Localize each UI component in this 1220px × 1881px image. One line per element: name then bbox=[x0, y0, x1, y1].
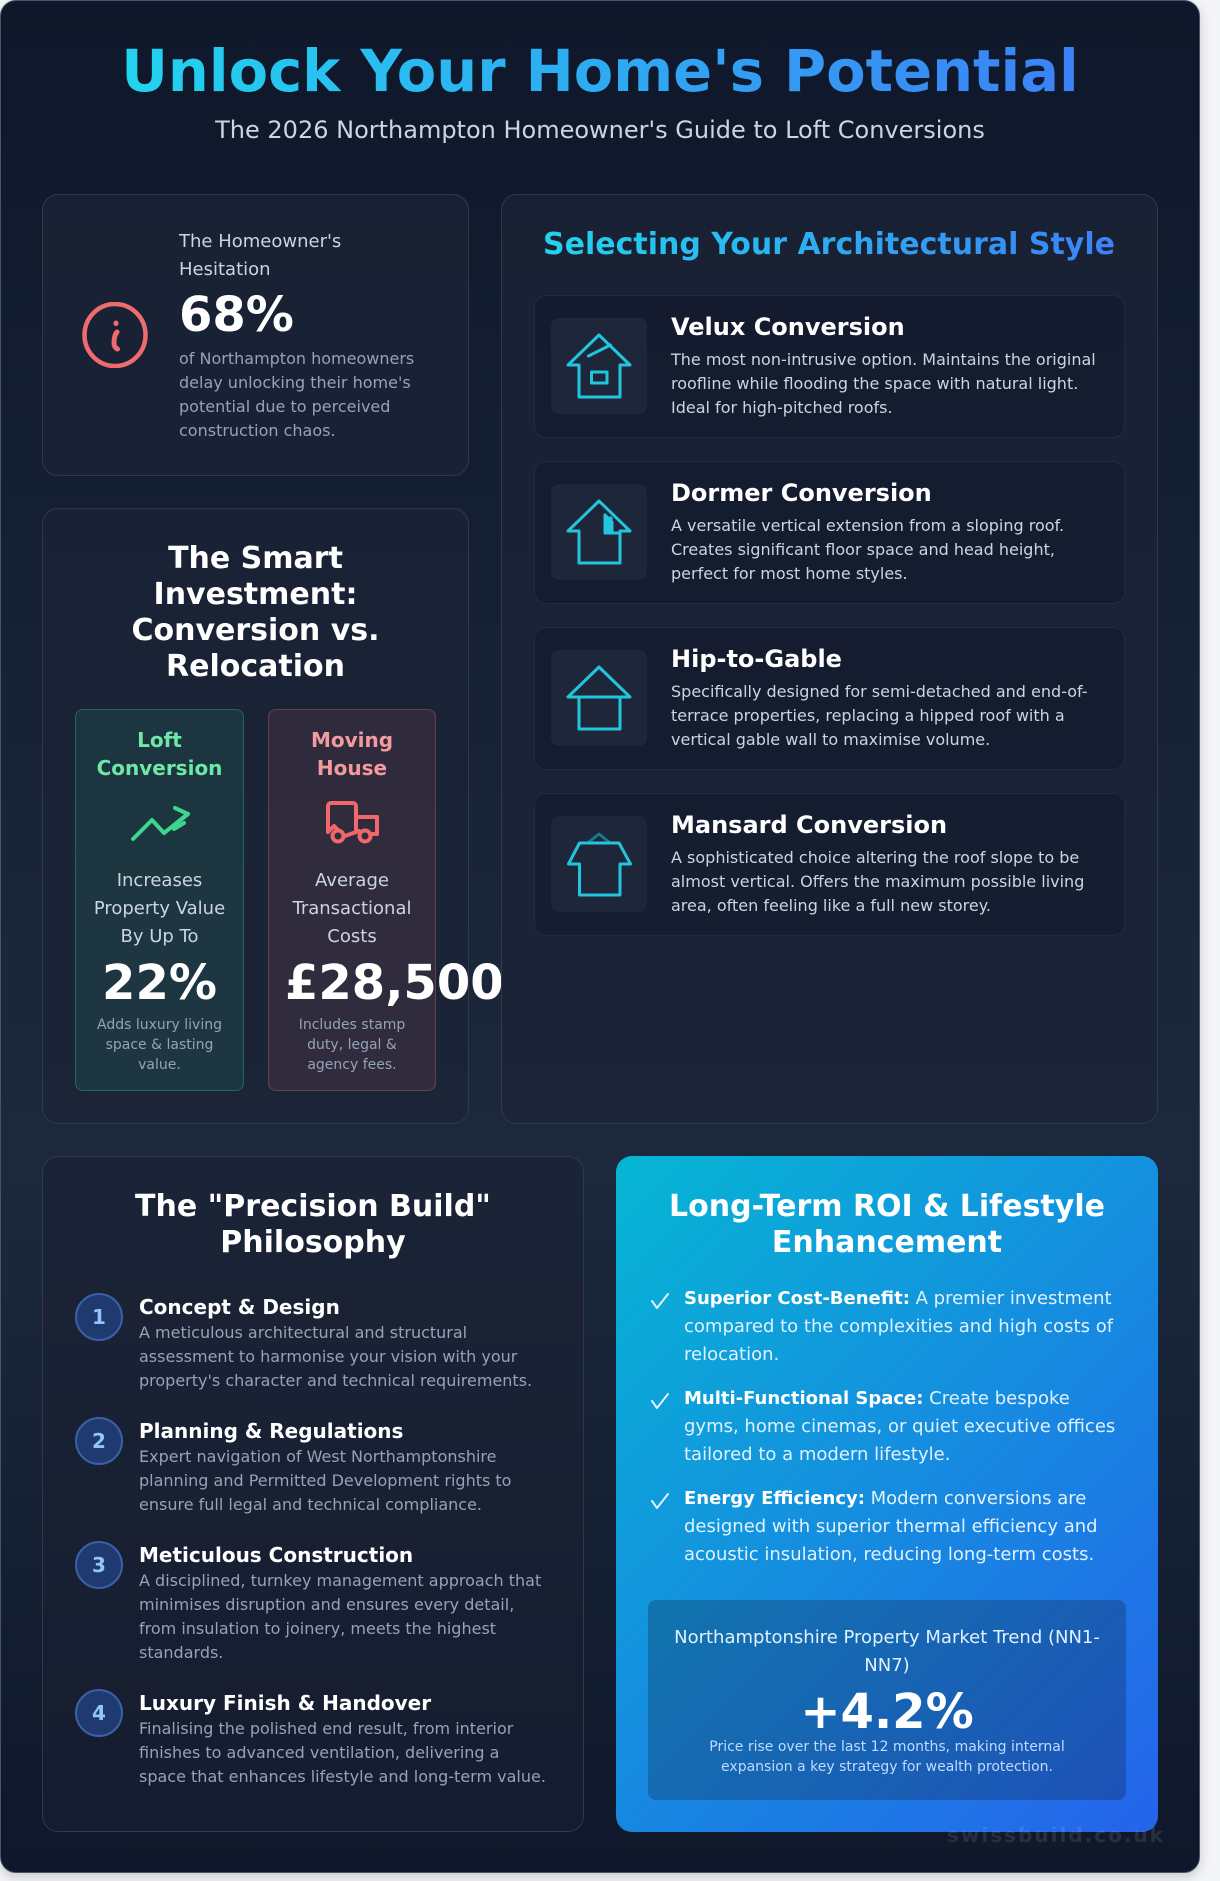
smart investment heading: Relocation bbox=[166, 649, 345, 684]
step 2 number bbox=[75, 1417, 123, 1465]
benefit 1: compared to the complexities and high costs of bbox=[684, 1316, 1113, 1336]
benefit 3: Energy Efficiency: Modern conversions are bbox=[684, 1488, 1086, 1508]
step 1 description: A meticulous architectural and structural bbox=[139, 1323, 467, 1342]
icon: check 3 bbox=[651, 1493, 669, 1509]
moving note: Includes stamp bbox=[299, 1017, 405, 1033]
hesitation label bbox=[178, 230, 341, 280]
hesitation description bbox=[179, 349, 414, 440]
dormer description bbox=[671, 516, 1064, 583]
icon: gable house bbox=[551, 650, 647, 746]
dormer description: A versatile vertical extension from a sloping roof. bbox=[671, 516, 1064, 535]
architectural styles heading: Selecting Your Architectural Style bbox=[543, 227, 1115, 262]
benefit 2: gyms, home cinemas, or quiet executive offices bbox=[684, 1416, 1115, 1436]
step 3 description: from insulation to joinery, meets the highest bbox=[139, 1619, 496, 1638]
ROI heading bbox=[669, 1189, 1105, 1260]
benefit 1: relocation. bbox=[684, 1344, 779, 1364]
icon: trending up bbox=[130, 806, 190, 842]
hesitation label: The Homeowner's bbox=[179, 230, 341, 252]
smart investment heading: Investment: bbox=[154, 577, 357, 612]
velux description bbox=[670, 350, 1096, 417]
step 3 description: minimises disruption and ensures every detail, bbox=[139, 1595, 514, 1614]
market trend note: expansion a key strategy for wealth protection. bbox=[721, 1759, 1053, 1775]
hesitation description: of Northampton homeowners bbox=[179, 349, 414, 368]
icon: mansard house bbox=[551, 816, 647, 912]
moving note: duty, legal & bbox=[307, 1037, 397, 1053]
step 4 title: Luxury Finish & Handover bbox=[139, 1691, 431, 1715]
step 3 description bbox=[139, 1571, 541, 1662]
icon: truck bbox=[326, 801, 379, 844]
panel: architectural styles bbox=[501, 194, 1158, 1124]
dormer title: Dormer Conversion bbox=[671, 479, 932, 507]
mansard description: almost vertical. Offers the maximum possible living bbox=[671, 872, 1084, 891]
step 4 description: space that enhances lifestyle and long-term value. bbox=[139, 1767, 546, 1786]
step 2 description bbox=[139, 1447, 511, 1514]
style card: mansard bbox=[534, 793, 1125, 936]
moving card heading bbox=[311, 728, 393, 780]
benefit 2: tailored to a modern lifestyle. bbox=[684, 1444, 950, 1464]
subtitle: The 2026 Northampton Homeowner's Guide to Loft Conversions bbox=[215, 116, 985, 144]
step 4 description bbox=[139, 1719, 546, 1786]
step 1 number bbox=[75, 1293, 123, 1341]
market trend note: Price rise over the last 12 months, making internal bbox=[709, 1739, 1065, 1755]
step 3 description: standards. bbox=[139, 1643, 223, 1662]
loft card heading bbox=[97, 728, 222, 780]
style card: dormer bbox=[534, 461, 1125, 604]
mansard title: Mansard Conversion bbox=[671, 811, 947, 839]
style card: hip-to-gable bbox=[534, 627, 1125, 770]
hesitation label: Hesitation bbox=[179, 258, 271, 280]
icon: check 2 bbox=[651, 1393, 669, 1409]
market trend statistic: +4.2% bbox=[800, 1684, 974, 1740]
callout: market trend bbox=[648, 1600, 1126, 1800]
moving note bbox=[299, 1017, 405, 1073]
loft note: value. bbox=[138, 1057, 181, 1073]
moving card heading: Moving bbox=[311, 728, 393, 752]
step 1 description: assessment to harmonise your vision with your bbox=[139, 1347, 517, 1366]
velux description: roofline while flooding the space with natural light. bbox=[671, 374, 1078, 393]
ROI heading: Enhancement bbox=[772, 1225, 1002, 1260]
style card: velux bbox=[534, 295, 1125, 438]
velux description: Ideal for high-pitched roofs. bbox=[671, 398, 893, 417]
hip-to-gable title: Hip-to-Gable bbox=[671, 645, 842, 673]
mansard description: area, often feeling like a full new storey. bbox=[671, 896, 991, 915]
loft statistic: 22% bbox=[102, 955, 217, 1011]
step 3 number bbox=[75, 1541, 123, 1589]
benefit 3: acoustic insulation, reducing long-term costs. bbox=[684, 1544, 1094, 1564]
step 2 title: Planning & Regulations bbox=[139, 1419, 403, 1443]
loft card heading: Conversion bbox=[97, 756, 222, 780]
dormer description: Creates significant floor space and head height, bbox=[671, 540, 1055, 559]
title: Unlock Your Home's Potential bbox=[121, 38, 1079, 105]
velux description: The most non-intrusive option. Maintains the original bbox=[671, 350, 1096, 369]
step 3 description: A disciplined, turnkey management approach that bbox=[139, 1571, 541, 1590]
moving card label: Average bbox=[315, 870, 389, 891]
benefit 3 bbox=[684, 1488, 1098, 1564]
icon: info circle bbox=[82, 302, 148, 368]
mansard description: A sophisticated choice altering the roof slope to be bbox=[671, 848, 1079, 867]
moving note: agency fees. bbox=[307, 1057, 397, 1073]
benefit 3: designed with superior thermal efficiency and bbox=[684, 1516, 1098, 1536]
moving card label: Costs bbox=[327, 926, 377, 947]
icon: dormer house bbox=[551, 484, 647, 580]
moving card label: Transactional bbox=[292, 898, 412, 919]
hip-to-gable description: Specifically designed for semi-detached and end-of- bbox=[671, 682, 1088, 701]
step 3 number: 3 bbox=[92, 1553, 106, 1577]
comparison card: moving house bbox=[268, 709, 436, 1091]
step 1 description: property's character and technical requirements. bbox=[139, 1371, 532, 1390]
step 2 description: Expert navigation of West Northamptonshire bbox=[139, 1447, 496, 1466]
loft note: space & lasting bbox=[106, 1037, 213, 1053]
market trend note bbox=[709, 1739, 1065, 1775]
step 2 number: 2 bbox=[92, 1429, 106, 1453]
panel: homeowner's hesitation bbox=[42, 194, 469, 476]
velux title: Velux Conversion bbox=[671, 313, 905, 341]
loft note bbox=[97, 1017, 222, 1073]
precision build heading: The "Precision Build" bbox=[135, 1189, 491, 1224]
hip-to-gable description: terrace properties, replacing a hipped roof with a bbox=[671, 706, 1065, 725]
moving card heading: House bbox=[317, 756, 387, 780]
hesitation description: potential due to perceived bbox=[179, 397, 390, 416]
loft card label bbox=[94, 870, 225, 947]
mansard description bbox=[671, 848, 1084, 915]
benefit 1: Superior Cost-Benefit: A premier investment bbox=[684, 1288, 1112, 1308]
moving card label bbox=[292, 870, 412, 947]
ROI heading: Long-Term ROI & Lifestyle bbox=[669, 1189, 1105, 1224]
smart investment heading bbox=[131, 541, 380, 684]
market trend label bbox=[674, 1627, 1100, 1676]
loft card heading: Loft bbox=[137, 728, 182, 752]
precision build heading: Philosophy bbox=[220, 1225, 406, 1260]
hesitation description: delay unlocking their home's bbox=[179, 373, 411, 392]
step 4 description: Finalising the polished end result, from interior bbox=[139, 1719, 513, 1738]
loft card label: Increases bbox=[117, 870, 202, 891]
icon: velux house bbox=[551, 318, 647, 414]
hesitation statistic: 68% bbox=[179, 287, 294, 343]
comparison card: loft conversion bbox=[75, 709, 244, 1091]
step 2 description: planning and Permitted Development rights to bbox=[139, 1471, 511, 1490]
loft card label: By Up To bbox=[120, 926, 198, 947]
step 4 description: finishes to advanced ventilation, delivering a bbox=[139, 1743, 499, 1762]
step 2 description: ensure full legal and technical compliance. bbox=[139, 1495, 482, 1514]
step 4 number: 4 bbox=[92, 1701, 106, 1725]
benefit 1 bbox=[684, 1288, 1114, 1364]
market trend label: NN7) bbox=[864, 1655, 910, 1676]
benefit 2 bbox=[684, 1388, 1115, 1464]
loft card label: Property Value bbox=[94, 898, 225, 919]
step 1 title: Concept & Design bbox=[139, 1295, 340, 1319]
benefit 2: Multi-Functional Space: Create bespoke bbox=[684, 1388, 1070, 1408]
panel: precision build bbox=[42, 1156, 584, 1832]
step 3 title: Meticulous Construction bbox=[139, 1543, 413, 1567]
step 4 number bbox=[75, 1689, 123, 1737]
hip-to-gable description: vertical gable wall to maximise volume. bbox=[671, 730, 990, 749]
watermark: swissbuild.co.uk bbox=[947, 1823, 1165, 1847]
loft note: Adds luxury living bbox=[97, 1017, 222, 1033]
icon: check 1 bbox=[651, 1293, 669, 1309]
precision build heading bbox=[135, 1189, 491, 1260]
step 1 number: 1 bbox=[92, 1305, 106, 1329]
moving statistic: £28,500 bbox=[285, 955, 504, 1011]
smart investment heading: Conversion vs. bbox=[131, 613, 380, 648]
hesitation description: construction chaos. bbox=[179, 421, 336, 440]
panel: long-term ROI bbox=[616, 1156, 1158, 1832]
smart investment heading: The Smart bbox=[168, 541, 343, 576]
hip-to-gable description bbox=[671, 682, 1088, 749]
panel: smart investment bbox=[42, 508, 469, 1124]
step 1 description bbox=[139, 1323, 532, 1390]
dormer description: perfect for most home styles. bbox=[671, 564, 908, 583]
market trend label: Northamptonshire Property Market Trend (NN1- bbox=[674, 1627, 1100, 1648]
